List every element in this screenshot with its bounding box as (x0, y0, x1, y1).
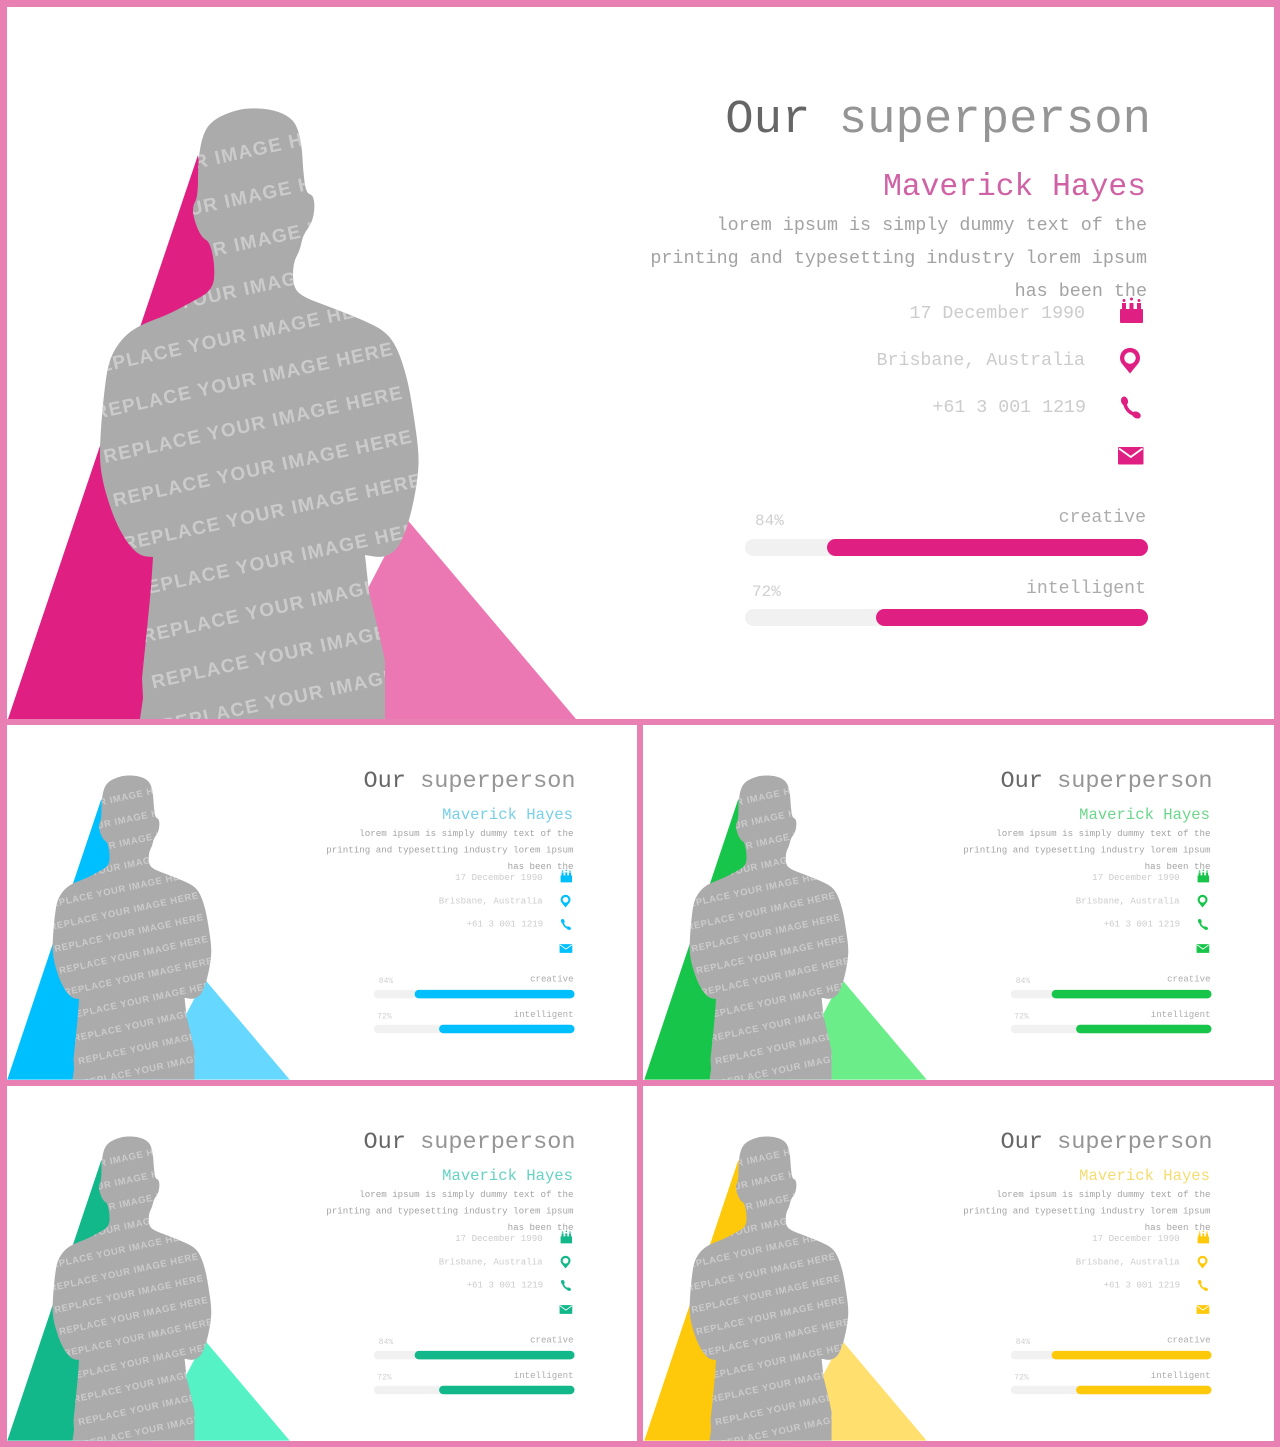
description: printing and typesetting industry lorem ipsum (326, 1205, 574, 1216)
bar: creative 84%: 84% (755, 512, 784, 530)
image placeholder silhouette: REPLACE YOUR IMAGE HERE (53, 1273, 205, 1316)
image placeholder silhouette: REPLACE YOUR IMAGE HERE (54, 164, 357, 249)
image placeholder silhouette: REPLACE YOUR IMAGE HERE (159, 652, 463, 737)
icon: map pin (1198, 1256, 1208, 1269)
name: Maverick Hayes (1079, 806, 1210, 824)
bar: creative 84% (1011, 973, 1212, 998)
icon: map pin (561, 1256, 571, 1269)
title: Our superperson (364, 768, 576, 795)
name: Maverick Hayes (1079, 1167, 1210, 1185)
image placeholder silhouette (52, 1136, 212, 1441)
title: Our superperson (725, 94, 1151, 147)
icon: phone (561, 919, 572, 931)
dark blue triangle (7, 799, 152, 1080)
image placeholder silhouette: REPLACE YOUR IMAGE HERE (690, 1273, 842, 1316)
description: has been the (1145, 861, 1211, 872)
description (326, 1189, 574, 1233)
phone: +61 3 001 1219 (932, 398, 1086, 418)
description: has been the (1015, 281, 1147, 302)
bar: intelligent 72% (374, 1009, 575, 1033)
icon: map pin (561, 895, 571, 908)
image placeholder silhouette: REPLACE YOUR IMAGE HERE (695, 934, 846, 977)
image placeholder silhouette: REPLACE YOUR IMAGE HERE (44, 120, 348, 206)
bar: creative 84%: creative (1167, 1334, 1211, 1345)
image placeholder silhouette (100, 108, 419, 719)
icon: map pin (1198, 895, 1208, 908)
icon: map pin (1120, 348, 1140, 374)
panel: blue slide (7, 768, 576, 1089)
bar: intelligent 72%: 72% (377, 1373, 392, 1382)
image placeholder silhouette: REPLACE YOUR IMAGE HERE (25, 1142, 176, 1185)
bar: creative 84%: creative (1059, 508, 1146, 528)
image placeholder silhouette: REPLACE YOUR IMAGE HERE (710, 1363, 861, 1406)
light blue triangle (152, 979, 290, 1080)
bar: intelligent 72% (1011, 1009, 1212, 1033)
name: Maverick Hayes (442, 806, 573, 824)
image placeholder silhouette: REPLACE YOUR IMAGE HERE (82, 295, 386, 380)
panel: teal slide (7, 1129, 576, 1447)
image placeholder silhouette: REPLACE YOUR IMAGE HERE (667, 803, 818, 846)
phone: +61 3 001 1219 (467, 1280, 543, 1291)
description (963, 1189, 1211, 1233)
panel: green slide (644, 768, 1213, 1089)
description: printing and typesetting industry lorem ipsum (650, 248, 1147, 269)
image placeholder silhouette: REPLACE YOUR IMAGE HERE (49, 890, 200, 933)
location: Brisbane, Australia (877, 351, 1085, 371)
icon: cake (1198, 1231, 1209, 1243)
description: printing and typesetting industry lorem ipsum (326, 844, 574, 855)
image placeholder silhouette: REPLACE YOUR IMAGE HERE (705, 979, 856, 1022)
image placeholder silhouette: REPLACE YOUR IMAGE HERE (58, 1295, 209, 1338)
icon: cake (1198, 870, 1209, 882)
bar: creative 84%: 84% (1016, 1338, 1030, 1347)
image placeholder silhouette: REPLACE YOUR IMAGE HERE (719, 1046, 870, 1089)
icon: envelope (560, 1305, 572, 1314)
image placeholder silhouette: REPLACE YOUR IMAGE HERE (686, 1251, 837, 1294)
description (326, 828, 574, 872)
image placeholder silhouette: REPLACE YOUR IMAGE HERE (714, 1024, 866, 1067)
image placeholder silhouette: REPLACE YOUR IMAGE HERE (82, 1046, 233, 1089)
description: lorem ipsum is simply dummy text of the (717, 215, 1147, 236)
image placeholder silhouette: REPLACE YOUR IMAGE HERE (681, 1230, 832, 1272)
image placeholder silhouette: REPLACE YOUR IMAGE HERE (39, 1208, 190, 1251)
panel: yellow slide (644, 1129, 1213, 1447)
image placeholder silhouette: REPLACE YOUR IMAGE HERE (77, 1385, 229, 1428)
location: Brisbane, Australia (1076, 1256, 1180, 1267)
image placeholder silhouette: REPLACE YOUR IMAGE HERE (676, 1208, 827, 1251)
image placeholder silhouette: REPLACE YOUR IMAGE HERE (34, 825, 186, 868)
image placeholder silhouette: REPLACE YOUR IMAGE HERE (68, 1340, 219, 1383)
bar: intelligent 72%: 72% (752, 583, 781, 601)
image placeholder silhouette: REPLACE YOUR IMAGE HERE (671, 1186, 823, 1229)
image placeholder silhouette: REPLACE YOUR IMAGE HERE (39, 847, 190, 890)
bar: creative 84% (374, 1334, 575, 1359)
bar: creative 84% (1011, 1334, 1212, 1359)
image placeholder silhouette (690, 776, 848, 1080)
image placeholder silhouette: REPLACE YOUR IMAGE HERE (150, 608, 453, 693)
image placeholder silhouette: REPLACE YOUR IMAGE HERE (681, 869, 832, 911)
icon: cake (561, 1231, 572, 1243)
image placeholder silhouette: REPLACE YOUR IMAGE HERE (714, 1385, 866, 1428)
icon: phone (1198, 919, 1209, 931)
icon: envelope (1197, 944, 1209, 953)
bar: creative 84% (745, 508, 1148, 556)
title: Our superperson (1001, 1129, 1213, 1156)
bar: intelligent 72%: intelligent (1151, 1009, 1211, 1020)
location: Brisbane, Australia (1076, 895, 1180, 906)
phone: +61 3 001 1219 (1104, 919, 1180, 930)
image placeholder silhouette: REPLACE YOUR IMAGE HERE (63, 1317, 214, 1360)
image placeholder silhouette: REPLACE YOUR IMAGE HERE (53, 912, 205, 955)
image placeholder silhouette: REPLACE YOUR IMAGE HERE (63, 956, 214, 999)
image placeholder silhouette: REPLACE YOUR IMAGE HERE (671, 825, 823, 868)
bar: creative 84% (374, 973, 575, 998)
icon: phone (1120, 396, 1142, 420)
icon: phone (561, 1280, 572, 1292)
image placeholder silhouette: REPLACE YOUR IMAGE HERE (710, 1002, 861, 1045)
image placeholder silhouette: REPLACE YOUR IMAGE HERE (686, 890, 837, 933)
birth date: 17 December 1990 (1092, 872, 1180, 883)
icon: phone (1198, 1280, 1209, 1292)
birth date: 17 December 1990 (909, 304, 1085, 324)
image placeholder silhouette: REPLACE YOUR IMAGE HERE (700, 956, 851, 999)
birth date: 17 December 1990 (455, 872, 543, 883)
bar: intelligent 72%: intelligent (1151, 1370, 1211, 1381)
name: Maverick Hayes (442, 1167, 573, 1185)
image placeholder silhouette: REPLACE YOUR IMAGE HERE (77, 1024, 229, 1067)
description: has been the (1145, 1222, 1211, 1233)
image placeholder silhouette: REPLACE YOUR IMAGE HERE (111, 426, 415, 512)
icon: cake (561, 870, 572, 882)
image placeholder silhouette: REPLACE YOUR IMAGE HERE (92, 339, 396, 424)
image placeholder silhouette: REPLACE YOUR IMAGE HERE (30, 1164, 181, 1207)
description: lorem ipsum is simply dummy text of the (996, 1189, 1211, 1200)
bar: intelligent 72% (1011, 1370, 1212, 1394)
image placeholder silhouette: REPLACE YOUR IMAGE HERE (121, 470, 424, 555)
bar: creative 84%: creative (1167, 973, 1211, 984)
bar: creative 84%: creative (530, 973, 574, 984)
image placeholder silhouette: REPLACE YOUR IMAGE HERE (667, 1164, 818, 1207)
bar: intelligent 72% (745, 579, 1148, 626)
image placeholder silhouette: REPLACE YOUR IMAGE HERE (705, 1340, 856, 1383)
image placeholder silhouette: REPLACE YOUR IMAGE HERE (73, 1002, 224, 1045)
bar: creative 84%: 84% (379, 977, 393, 986)
name: Maverick Hayes (883, 170, 1146, 205)
dark teal triangle (7, 1160, 152, 1441)
bar: creative 84%: 84% (1016, 977, 1030, 986)
description: has been the (508, 1222, 574, 1233)
light teal triangle (152, 1340, 290, 1441)
bar: intelligent 72%: intelligent (514, 1370, 574, 1381)
icon: cake (1120, 298, 1143, 323)
location: Brisbane, Australia (439, 1256, 543, 1267)
image placeholder silhouette: REPLACE YOUR IMAGE HERE (34, 1186, 186, 1229)
bar: intelligent 72% (374, 1370, 575, 1394)
image placeholder silhouette: REPLACE YOUR IMAGE HERE (44, 869, 195, 911)
image placeholder silhouette: REPLACE YOUR IMAGE HERE (25, 781, 176, 824)
phone: +61 3 001 1219 (467, 919, 543, 930)
light green triangle (789, 979, 927, 1080)
description (963, 828, 1211, 872)
description (650, 215, 1147, 302)
bar: creative 84%: 84% (379, 1338, 393, 1347)
dark yellow triangle (644, 1160, 789, 1441)
bar: intelligent 72%: 72% (377, 1012, 392, 1021)
image placeholder silhouette: REPLACE YOUR IMAGE HERE (68, 979, 219, 1022)
birth date: 17 December 1990 (455, 1233, 543, 1244)
light yellow triangle (789, 1340, 927, 1441)
description: lorem ipsum is simply dummy text of the (996, 828, 1211, 839)
bar: intelligent 72%: intelligent (514, 1009, 574, 1020)
image placeholder silhouette: REPLACE YOUR IMAGE HERE (695, 1295, 846, 1338)
bar: intelligent 72%: intelligent (1026, 579, 1146, 599)
dark green triangle (644, 799, 789, 1080)
description: has been the (508, 861, 574, 872)
phone: +61 3 001 1219 (1104, 1280, 1180, 1291)
description: printing and typesetting industry lorem ipsum (963, 844, 1211, 855)
image placeholder silhouette: REPLACE YOUR IMAGE HERE (130, 517, 434, 602)
image placeholder silhouette: REPLACE YOUR IMAGE HERE (690, 912, 842, 955)
image placeholder silhouette: REPLACE YOUR IMAGE HERE (30, 803, 181, 846)
image placeholder silhouette (690, 1136, 848, 1441)
image placeholder silhouette: REPLACE YOUR IMAGE HERE (73, 252, 376, 337)
image placeholder silhouette: REPLACE YOUR IMAGE HERE (662, 1142, 813, 1185)
icon: envelope (560, 944, 572, 953)
image placeholder silhouette: REPLACE YOUR IMAGE HERE (63, 208, 367, 293)
description: printing and typesetting industry lorem ipsum (963, 1205, 1211, 1216)
image placeholder silhouette: REPLACE YOUR IMAGE HERE (700, 1317, 851, 1360)
bar: creative 84%: creative (530, 1334, 574, 1345)
image placeholder silhouette: REPLACE YOUR IMAGE HERE (49, 1251, 200, 1294)
image placeholder silhouette (52, 776, 212, 1080)
image placeholder silhouette: REPLACE YOUR IMAGE HERE (44, 1230, 195, 1272)
description: lorem ipsum is simply dummy text of the (359, 828, 574, 839)
image placeholder silhouette: REPLACE YOUR IMAGE HERE (662, 781, 813, 824)
image placeholder silhouette: REPLACE YOUR IMAGE HERE (58, 934, 209, 977)
title: Our superperson (1001, 768, 1213, 795)
bar: intelligent 72%: 72% (1014, 1373, 1029, 1382)
icon: envelope (1197, 1305, 1209, 1314)
dark pink triangle (8, 155, 300, 719)
location: Brisbane, Australia (439, 895, 543, 906)
image placeholder silhouette: REPLACE YOUR IMAGE HERE (73, 1363, 224, 1406)
description: lorem ipsum is simply dummy text of the (359, 1189, 574, 1200)
panel: pink slide (8, 94, 1151, 737)
birth date: 17 December 1990 (1092, 1233, 1180, 1244)
title: Our superperson (364, 1129, 576, 1156)
light pink triangle (300, 517, 576, 719)
icon: envelope (1118, 447, 1144, 464)
image placeholder silhouette: REPLACE YOUR IMAGE HERE (140, 562, 444, 648)
image placeholder silhouette: REPLACE YOUR IMAGE HERE (102, 383, 405, 468)
bar: intelligent 72%: 72% (1014, 1012, 1029, 1021)
image placeholder silhouette: REPLACE YOUR IMAGE HERE (676, 847, 827, 890)
